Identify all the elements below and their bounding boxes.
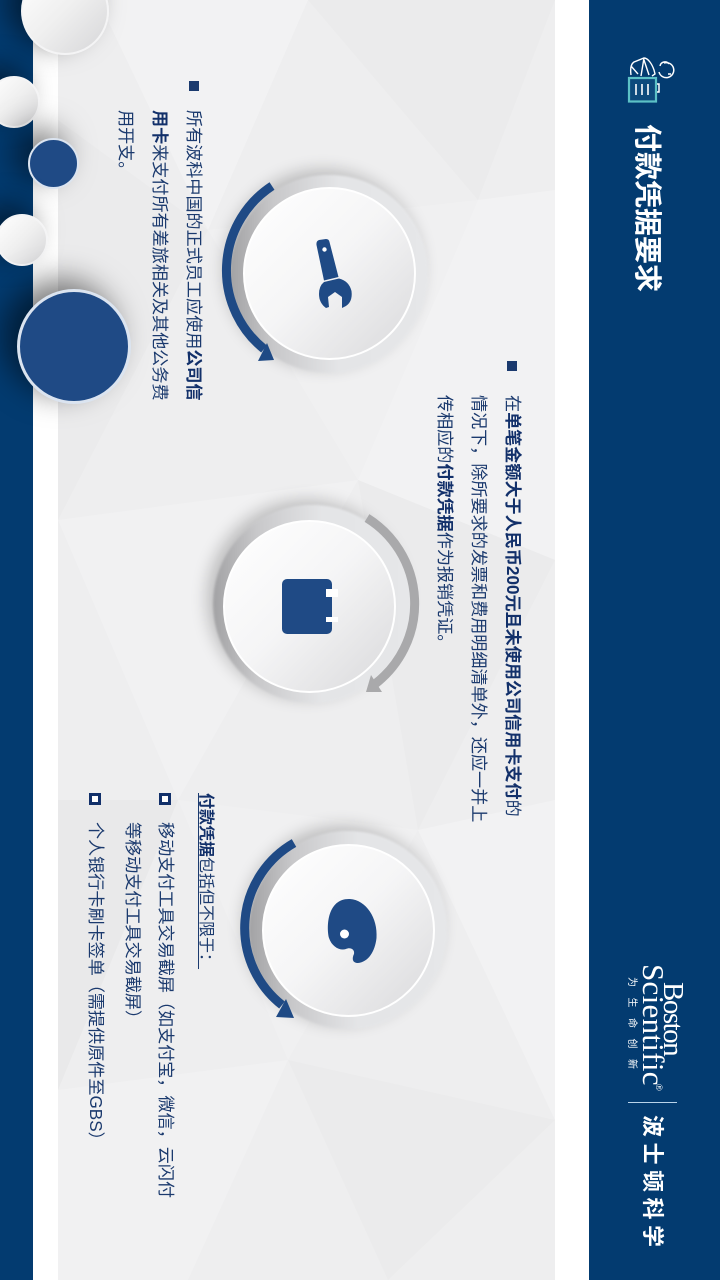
- arrow: [364, 514, 420, 692]
- header icon: [628, 57, 674, 103]
- decorative ball 2: [0, 76, 40, 128]
- text block: payment voucher condition: [435, 361, 522, 822]
- disc: [243, 187, 416, 360]
- logo wordmark: [626, 964, 689, 1253]
- line 1: 所有波科中国的正式员工应使用 公司信: [184, 110, 203, 401]
- line 3: 传相应的 付款凭据 作为报销凭证。: [435, 395, 454, 651]
- item 1 line 1: 移动支付工具交易截屏（如支付宝，微信，云闪付: [156, 822, 175, 1198]
- decorative ball 1: [21, 0, 109, 55]
- disc: [223, 520, 396, 693]
- logo text: Boston: Boston: [657, 982, 689, 1055]
- arrow: [222, 182, 274, 361]
- left navy band: [0, 0, 33, 1280]
- text block: voucher list: [86, 793, 215, 1198]
- registered mark: ®: [654, 1084, 664, 1091]
- text block: company credit card: [116, 81, 203, 401]
- logo text: Scientific: Scientific: [636, 964, 671, 1086]
- logo divider: [628, 1102, 677, 1103]
- item 1 line 2: 等移动支付工具交易截屏）: [123, 822, 142, 1027]
- halo: [213, 505, 411, 703]
- icon: palette: [328, 899, 377, 963]
- logo tagline: 为生命创新: [626, 977, 637, 1080]
- decorative ball 3: [0, 214, 48, 266]
- bullet 2: [89, 793, 101, 805]
- icon: notebook: [282, 579, 338, 634]
- icon: wrench: [316, 239, 352, 308]
- right navy band: [589, 0, 720, 1280]
- arrow: [240, 839, 296, 1018]
- line 2: 情况下，除所要求的发票和费用明细清单外，还应一并上: [469, 395, 488, 822]
- line 3: 用开支。: [116, 110, 135, 178]
- company name: 波士顿科学: [640, 1115, 665, 1253]
- decorative blue ball large: [17, 289, 131, 404]
- bullet: [507, 361, 517, 371]
- halo: [230, 175, 428, 373]
- textured background panel: [58, 0, 555, 1280]
- decorative blue ball small: [28, 138, 79, 189]
- bullet: [189, 81, 199, 91]
- circle 2: notebook: [200, 492, 420, 706]
- circle 3: palette: [236, 818, 449, 1032]
- title: 付款凭据要求: [632, 124, 663, 292]
- bullet 1: [159, 793, 171, 805]
- item 2: 个人银行卡刷卡签单（需提供原件至GBS）: [86, 822, 105, 1149]
- disc: [262, 844, 435, 1017]
- heading line: 付款凭据 包括但不限于：: [197, 793, 214, 969]
- line 1: 在 单笔金额大于人民币200元且未使用公司信用卡支付 的: [503, 395, 522, 817]
- circle 1: wrench: [216, 162, 430, 376]
- halo: [249, 831, 447, 1029]
- line 2: 用卡 来支付所有差旅相关及其他公务费: [150, 110, 169, 401]
